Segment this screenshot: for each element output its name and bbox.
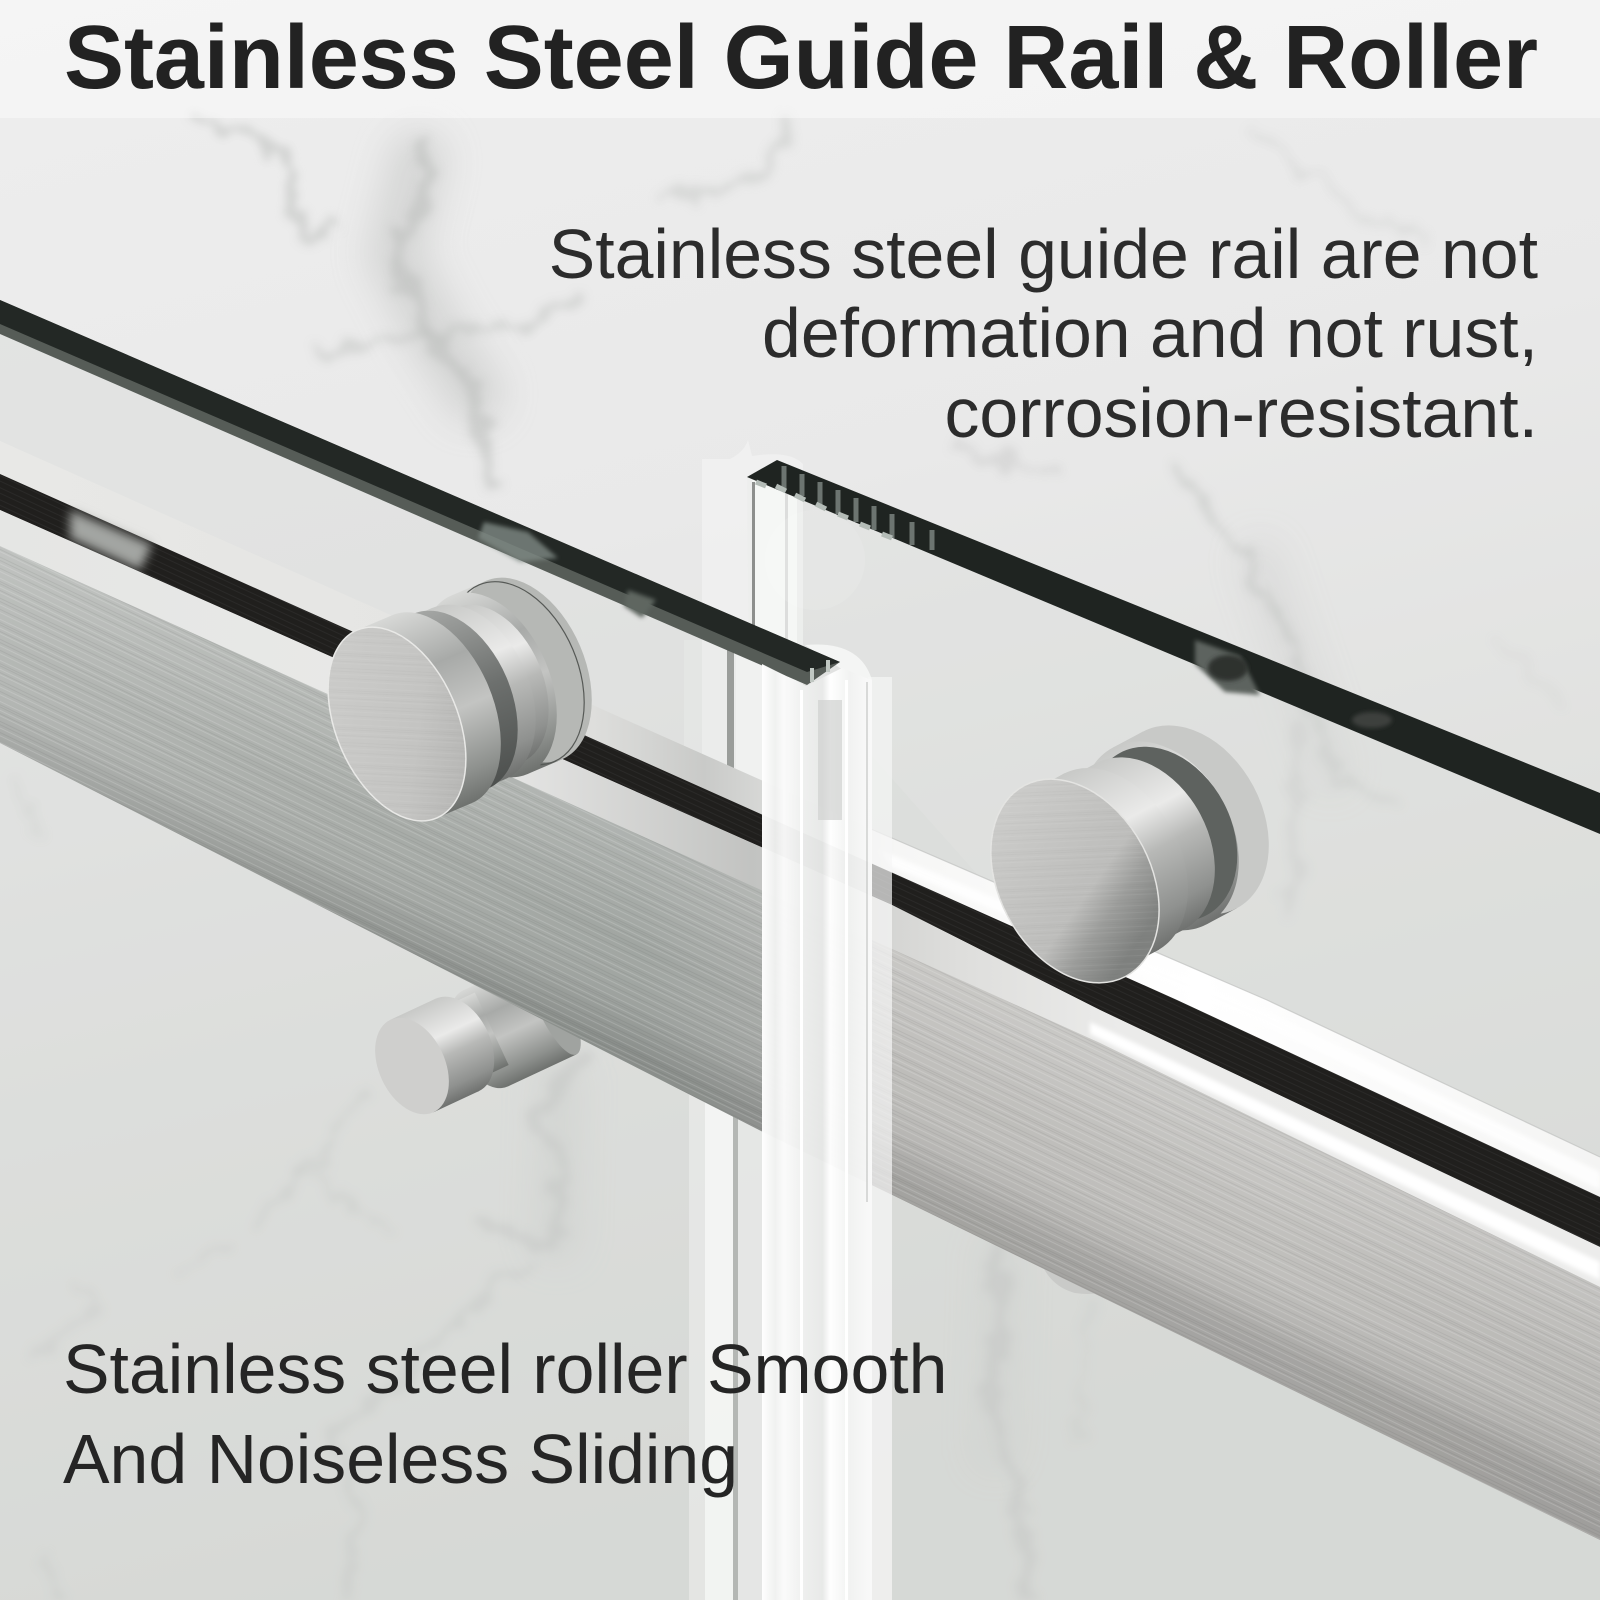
brushed rail face bbox=[0, 546, 1600, 1540]
neck bbox=[381, 587, 572, 794]
black rail slot bbox=[0, 474, 1600, 1247]
dark ring bbox=[357, 590, 544, 813]
front door seal strip bbox=[762, 660, 892, 1600]
refracted seal line below panel edge bbox=[684, 640, 762, 800]
back door seal strip bbox=[684, 440, 865, 800]
back flange bbox=[1049, 698, 1300, 958]
left glass panel top edge bbox=[0, 300, 840, 685]
text block: roller description bbox=[63, 1330, 948, 1498]
text block: roller description: And Noiseless Sliding bbox=[63, 1420, 738, 1498]
text block: roller description: Stainless steel roller Smooth bbox=[63, 1330, 948, 1408]
rim bbox=[336, 591, 528, 827]
upper chrome band bbox=[0, 441, 1600, 1200]
knob guide below rail bbox=[361, 948, 591, 1133]
front flange bbox=[376, 584, 561, 803]
text block: guide rail description: corrosion-resistant. bbox=[945, 374, 1538, 452]
text block: guide rail description bbox=[549, 215, 1538, 452]
glass pane tint bbox=[0, 334, 1600, 1600]
mounting stud behind rail bbox=[1037, 1250, 1108, 1294]
rail highlight bbox=[1090, 1022, 1600, 1280]
text block: guide rail description: Stainless steel guide rail are not bbox=[549, 215, 1538, 293]
seal body bbox=[762, 664, 872, 1600]
neck bbox=[1002, 741, 1219, 983]
glass hole fitting on right panel bbox=[1195, 640, 1392, 728]
title band bbox=[0, 0, 1600, 118]
roller right bbox=[957, 691, 1304, 1012]
roller face bbox=[957, 750, 1193, 1012]
back flange bbox=[395, 557, 618, 798]
flap bbox=[868, 677, 892, 1600]
title: Stainless Steel Guide Rail & Roller bbox=[64, 8, 1538, 108]
right glass panel top edge bbox=[747, 460, 1600, 834]
slot reflection bbox=[70, 510, 152, 570]
text block: guide rail description: deformation and not rust, bbox=[762, 294, 1538, 372]
seal rear lip bbox=[805, 644, 872, 680]
seal lower section below rail bbox=[689, 1090, 763, 1600]
lower chrome band bbox=[0, 510, 1600, 1287]
dark gasket bbox=[1060, 721, 1267, 947]
roller left bbox=[301, 552, 620, 842]
brushed stainless steel guide rail bbox=[0, 441, 1600, 1540]
front flange bbox=[1036, 731, 1245, 961]
roller face bbox=[301, 606, 493, 842]
